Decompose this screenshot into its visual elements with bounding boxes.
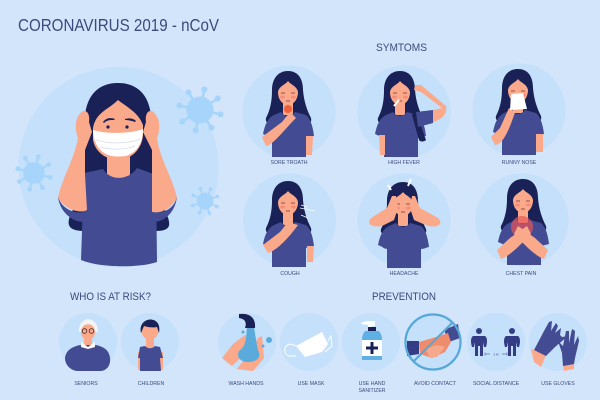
panel: use gloves xyxy=(529,313,587,387)
panel: social distance xyxy=(467,313,525,387)
label: USE HAND xyxy=(359,381,386,387)
panel: runny nose xyxy=(472,64,566,166)
panel: headache xyxy=(358,174,450,277)
label: AVOID CONTACT xyxy=(414,381,457,387)
label: COUGH xyxy=(280,271,300,277)
panel: seniors xyxy=(59,313,117,387)
heading: who is at risk: WHO IS AT RISK? xyxy=(70,291,151,303)
panel: hand sanitizer xyxy=(342,313,400,394)
label: USE GLOVES xyxy=(541,381,575,387)
panel: chest pain xyxy=(476,174,568,277)
panel: children xyxy=(121,313,179,387)
panel: cough xyxy=(243,174,336,277)
face xyxy=(93,100,143,160)
label: HIGH FEVER xyxy=(388,160,420,166)
panel: high fever xyxy=(358,66,450,166)
panel: social distance: 2 M xyxy=(493,352,499,356)
mask xyxy=(93,129,143,157)
panel: main figure with mask xyxy=(10,67,228,267)
left arm xyxy=(58,111,92,212)
label: USE MASK xyxy=(298,381,325,387)
person left xyxy=(471,328,487,356)
eyes xyxy=(103,118,136,123)
title: CORONAVIRUS 2019 - nCoV xyxy=(18,15,219,35)
hair xyxy=(69,83,169,231)
heading: prevention: PREVENTION xyxy=(372,291,436,303)
panel: hand sanitizer: SANITIZER xyxy=(358,388,386,394)
label: CHEST PAIN xyxy=(506,271,537,277)
heading: symptoms: SYMTOMS xyxy=(376,42,427,54)
panel: avoid contact xyxy=(404,313,462,387)
label: WASH HANDS xyxy=(229,381,264,387)
right arm xyxy=(143,111,177,212)
label: RUNNY NOSE xyxy=(502,160,537,166)
label: SORE TROATH xyxy=(270,160,308,166)
distance arrow xyxy=(485,352,507,356)
label: CHILDREN xyxy=(138,381,165,387)
neck xyxy=(107,150,130,178)
label: SENIORS xyxy=(74,381,98,387)
panel: wash hands xyxy=(218,313,276,387)
person right xyxy=(504,328,520,356)
shirt xyxy=(81,168,157,266)
panel: sore throat xyxy=(242,66,336,166)
panel: use mask xyxy=(280,313,338,387)
label: HEADACHE xyxy=(390,271,419,277)
label: SOCIAL DISTANCE xyxy=(473,381,520,387)
virus particles xyxy=(10,82,228,221)
